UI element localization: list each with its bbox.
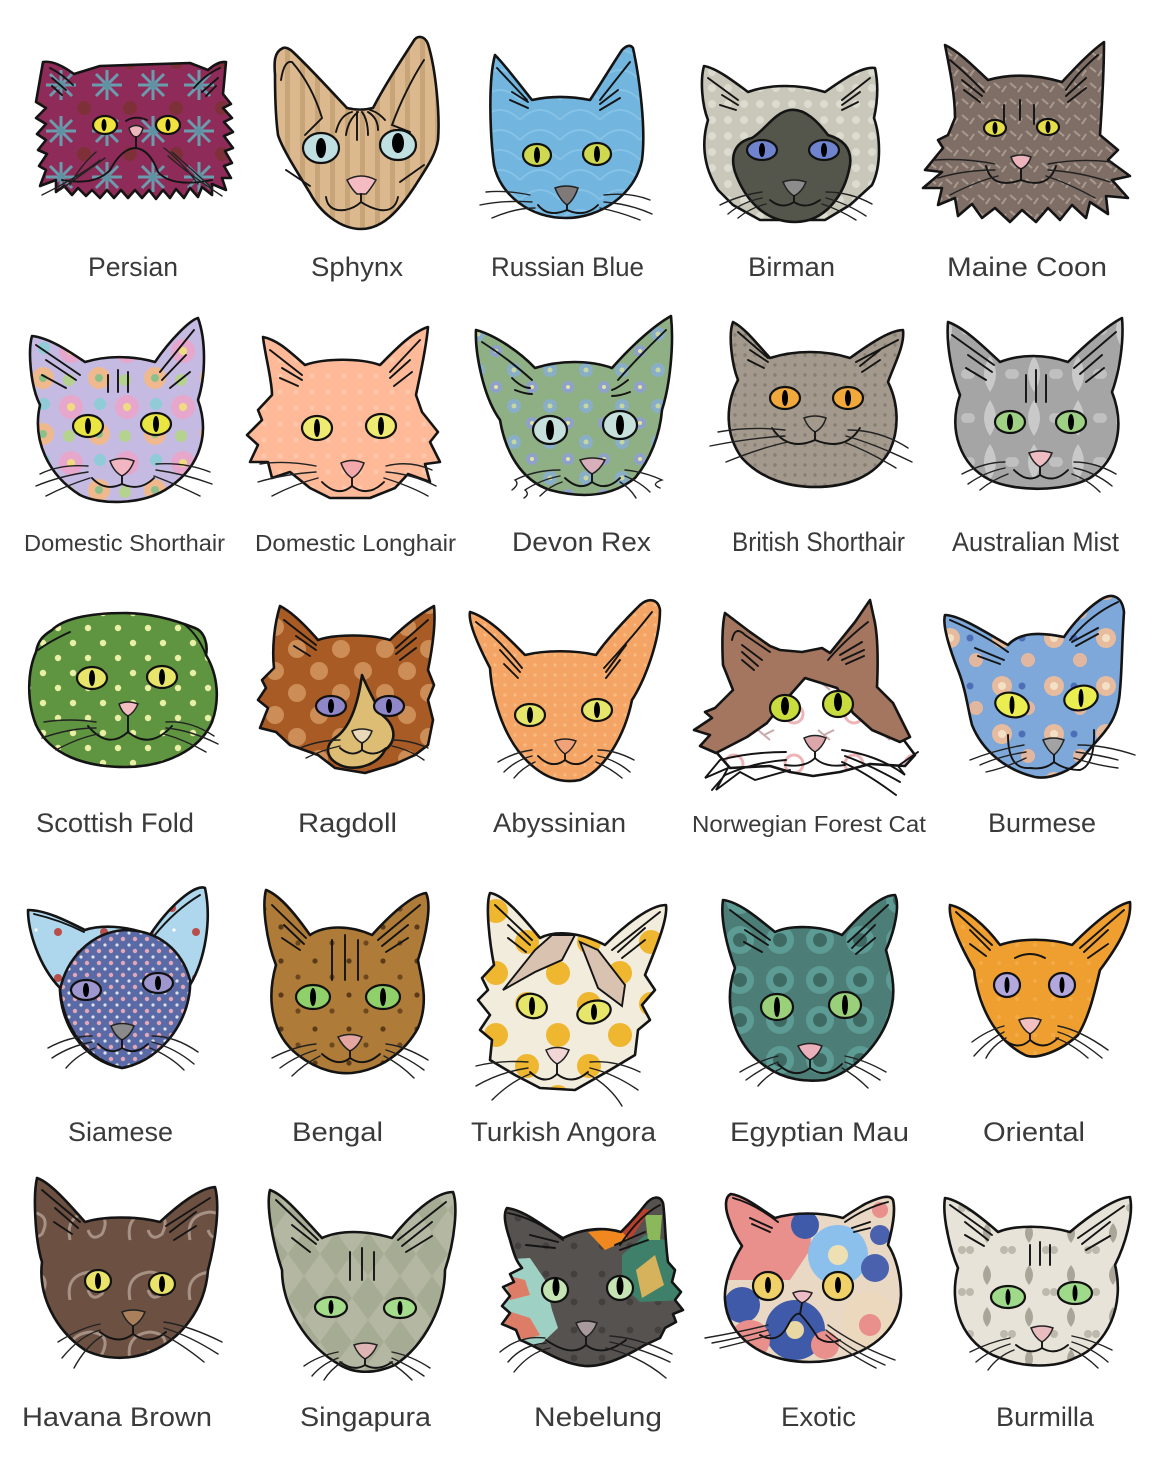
eyes	[316, 696, 404, 716]
head	[29, 613, 217, 767]
eyes	[995, 411, 1086, 433]
cat: Nebelung	[495, 1190, 690, 1432]
mouth	[62, 137, 212, 183]
head	[490, 46, 643, 218]
ear and forehead lines	[36, 330, 194, 392]
cat: Oriental	[950, 902, 1130, 1147]
label: Burmilla	[996, 1402, 1095, 1432]
nose	[555, 186, 578, 205]
cat: Birman	[702, 66, 879, 282]
nose	[338, 1034, 362, 1051]
cat: Ragdoll	[258, 606, 435, 838]
head	[258, 606, 435, 773]
floral fill	[726, 1195, 900, 1361]
ear lines	[708, 78, 870, 110]
nose	[546, 1048, 569, 1064]
mouth	[1014, 467, 1068, 479]
cat: Siamese	[28, 888, 208, 1147]
head	[36, 62, 233, 199]
head	[264, 890, 428, 1073]
label: Oriental	[983, 1117, 1085, 1147]
nose	[341, 460, 364, 478]
head	[269, 1190, 455, 1372]
nose	[352, 729, 372, 743]
nose	[129, 126, 143, 137]
mouth	[565, 474, 620, 486]
eyes	[542, 1276, 633, 1302]
eyes	[992, 682, 1101, 721]
cat: Scottish Fold	[29, 613, 218, 838]
whiskers	[42, 720, 218, 752]
eyes	[991, 1282, 1092, 1308]
whiskers	[962, 462, 1116, 492]
label: Devon Rex	[512, 527, 652, 557]
mouth	[100, 1326, 166, 1340]
head	[247, 327, 440, 498]
cat: Domestic Longhair	[247, 327, 456, 556]
label: Siamese	[68, 1117, 173, 1147]
label: Burmese	[988, 808, 1096, 838]
nose	[122, 1310, 145, 1326]
ear lines	[497, 62, 630, 110]
mouth	[88, 716, 172, 740]
ear lines	[476, 612, 652, 678]
label: Singapura	[300, 1402, 432, 1432]
mouth	[772, 428, 860, 444]
whiskers	[272, 1044, 428, 1078]
nose	[1031, 1326, 1053, 1342]
head	[30, 318, 204, 502]
cat: Persian	[36, 62, 233, 282]
brown upper coat	[694, 600, 910, 753]
head	[729, 322, 903, 487]
head outline	[502, 1198, 683, 1366]
cat: Australian Mist	[948, 318, 1123, 557]
light blaze	[328, 675, 393, 768]
cat: Havana Brown	[22, 1178, 222, 1432]
whiskers	[710, 428, 912, 468]
nose	[119, 702, 138, 716]
nose	[576, 1321, 597, 1337]
label: Australian Mist	[952, 527, 1119, 557]
head	[275, 37, 439, 229]
ear and forehead lines	[272, 905, 420, 980]
cat: Sphynx	[275, 37, 439, 282]
nose	[804, 416, 826, 432]
mouth	[92, 476, 154, 487]
mouth	[98, 1040, 148, 1051]
eyes	[85, 1270, 175, 1295]
head	[478, 893, 666, 1090]
nose	[347, 176, 376, 194]
label: Egyptian Mau	[730, 1117, 909, 1147]
mouth	[1016, 1342, 1068, 1351]
ear lines	[482, 330, 666, 396]
nose	[1019, 1018, 1041, 1034]
mouth	[785, 752, 845, 766]
mouth	[340, 743, 386, 754]
label: Russian Blue	[491, 252, 644, 282]
eyes	[523, 143, 611, 166]
eyes	[515, 699, 612, 726]
label: British Shorthair	[732, 527, 905, 557]
head	[28, 888, 208, 1068]
cat: Burmese	[944, 596, 1135, 838]
ear lines	[270, 340, 420, 386]
head	[944, 1197, 1131, 1366]
mouth	[778, 1060, 842, 1073]
head	[950, 902, 1130, 1056]
nose	[804, 736, 826, 752]
whiskers	[48, 1036, 198, 1070]
mouth	[538, 205, 598, 213]
nose	[793, 1291, 812, 1303]
ear lines	[508, 1205, 660, 1250]
cat: Maine Coon	[923, 42, 1130, 282]
mouth	[760, 1303, 840, 1342]
eyes	[77, 666, 177, 689]
eyes	[303, 130, 416, 163]
forehead patches	[503, 935, 625, 1006]
whiskers	[512, 470, 662, 498]
head outline	[725, 1194, 901, 1362]
nose	[580, 458, 605, 474]
face mask	[733, 110, 850, 222]
mouth	[538, 754, 592, 764]
head	[702, 66, 879, 220]
cat: Egyptian Mau	[722, 895, 909, 1147]
head	[470, 600, 660, 781]
whiskers	[970, 745, 1135, 772]
nose	[1043, 738, 1064, 755]
cat: Turkish Angora	[471, 893, 666, 1147]
patchwork fill	[504, 1198, 681, 1365]
eyes	[984, 119, 1059, 136]
whiskers	[42, 148, 222, 196]
label: Birman	[748, 252, 835, 282]
label: Abyssinian	[493, 808, 626, 838]
label: Sphynx	[311, 252, 404, 282]
head	[476, 316, 672, 495]
ear and forehead lines	[952, 332, 1116, 402]
label: Scottish Fold	[36, 808, 194, 838]
nose	[798, 1044, 822, 1060]
cat: Exotic	[705, 1190, 910, 1432]
ear and face lines	[50, 68, 220, 121]
whiskers	[498, 750, 634, 778]
eyes	[770, 387, 863, 409]
whiskers	[500, 1336, 672, 1378]
nose	[110, 458, 134, 476]
head	[722, 895, 897, 1081]
whiskers	[304, 1352, 430, 1380]
whiskers	[970, 1336, 1112, 1370]
ear lines	[34, 895, 200, 936]
whiskers	[720, 192, 872, 220]
nose	[783, 180, 806, 196]
label: Norwegian Forest Cat	[692, 811, 927, 837]
whiskers	[935, 160, 1112, 198]
nose	[1011, 155, 1031, 169]
head	[948, 318, 1123, 489]
eyes	[315, 1297, 416, 1318]
mouth	[770, 196, 820, 206]
eyes	[747, 140, 839, 160]
whiskers	[972, 1026, 1108, 1058]
whiskers and fur	[705, 750, 918, 795]
ear lines	[495, 905, 660, 958]
label: Turkish Angora	[471, 1117, 657, 1147]
mouth	[530, 1064, 588, 1080]
eyes	[71, 973, 173, 1000]
eyes	[93, 116, 180, 134]
mouth	[322, 478, 384, 491]
ear and forehead lines	[276, 1200, 446, 1280]
eyes	[994, 973, 1075, 997]
mouth	[326, 194, 398, 210]
whiskers	[300, 740, 428, 760]
ear lines	[733, 1198, 888, 1232]
cat: Norwegian Forest Cat	[692, 600, 927, 837]
label: Domestic Longhair	[255, 530, 456, 556]
whiskers	[480, 191, 652, 220]
ear and forehead lines	[281, 60, 424, 186]
label: Persian	[88, 252, 178, 282]
eyes	[302, 414, 396, 440]
ear and forehead lines	[956, 910, 1124, 958]
cat: Abyssinian	[470, 600, 660, 838]
nose	[354, 1343, 377, 1359]
mouth	[322, 1051, 380, 1062]
mouth	[1002, 1034, 1058, 1046]
nose	[111, 1024, 134, 1040]
cat: Russian Blue	[480, 46, 652, 282]
mouth	[340, 1359, 392, 1368]
eyes	[514, 991, 613, 1027]
ear lines	[730, 905, 888, 954]
mouth	[1008, 730, 1094, 770]
cat: Devon Rex	[476, 316, 672, 557]
mouth	[986, 166, 1056, 183]
ear lines	[950, 602, 1118, 664]
cat: Bengal	[264, 890, 428, 1147]
whiskers	[476, 1062, 640, 1106]
whiskers	[740, 1056, 886, 1088]
head	[923, 42, 1130, 222]
nose	[555, 739, 576, 754]
eyes	[770, 691, 853, 721]
whiskers	[258, 462, 436, 496]
ear and forehead lines	[950, 55, 1098, 125]
eyes	[296, 985, 400, 1009]
cat: British Shorthair	[710, 322, 912, 557]
whiskers	[58, 1322, 222, 1368]
ear and forehead lines	[950, 1205, 1124, 1265]
ear folds	[38, 625, 206, 655]
eyes	[761, 992, 861, 1020]
eyes	[533, 411, 637, 444]
label: Nebelung	[534, 1402, 662, 1432]
label: Havana Brown	[22, 1402, 212, 1432]
eyes	[753, 1272, 853, 1300]
ear lines	[42, 1190, 210, 1240]
ear lines	[284, 620, 428, 660]
nose	[1029, 451, 1052, 467]
cat: Domestic Shorthair	[24, 318, 225, 556]
cat: Singapura	[269, 1190, 455, 1432]
cat: Burmilla	[944, 1197, 1131, 1432]
ear lines	[738, 332, 898, 372]
label: Ragdoll	[298, 808, 397, 838]
label: Bengal	[292, 1117, 383, 1147]
head	[944, 596, 1124, 778]
whiskers	[36, 464, 212, 496]
mouth	[546, 1337, 626, 1350]
eyes	[73, 413, 171, 437]
label: Maine Coon	[947, 252, 1107, 282]
label: Domestic Shorthair	[24, 530, 225, 556]
ear lines	[732, 622, 868, 670]
label: Exotic	[781, 1402, 856, 1432]
white lower face	[717, 670, 915, 776]
head	[35, 1178, 217, 1358]
face mask	[60, 930, 190, 1068]
whiskers	[705, 1325, 895, 1368]
